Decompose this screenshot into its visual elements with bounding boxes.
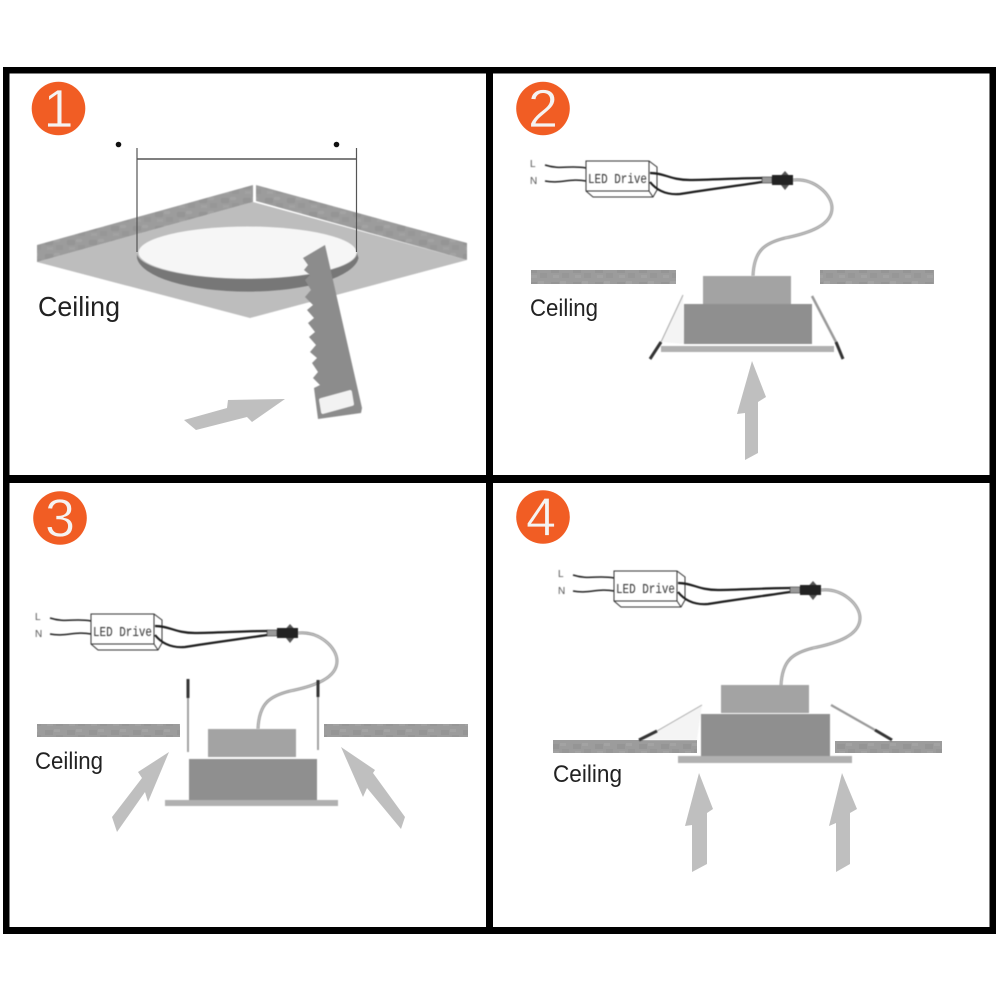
arrow: right up [829, 773, 857, 872]
panel: step 4 lamp seated in ceiling [516, 488, 942, 872]
ceiling section left [37, 724, 180, 737]
arrow: push up [737, 361, 766, 460]
label: Ceiling: Ceiling [553, 761, 622, 788]
downlight with raised springs [165, 679, 338, 806]
ceiling slab with round hole [37, 185, 467, 318]
ceiling section right [820, 270, 934, 284]
badge: number 4: 4 [526, 488, 556, 548]
LED driver with wiring: N [530, 176, 537, 187]
ceiling section right [324, 724, 468, 737]
arrow: left diagonal [112, 752, 169, 832]
LED driver with wiring: LED Drive [588, 173, 647, 188]
arrow: right diagonal [341, 747, 405, 829]
LED driver with wiring: LED Drive [616, 583, 675, 598]
label: Ceiling: Ceiling [35, 748, 103, 775]
LED driver with wiring: L [35, 612, 41, 623]
LED driver with wiring [558, 569, 860, 686]
ceiling section left [531, 270, 676, 284]
panel: step 2 connect driver and insert lamp [516, 79, 934, 460]
downlight with springs [650, 276, 843, 359]
badge: number 1 [32, 79, 85, 139]
panel: step 1 cut the ceiling hole [32, 79, 467, 430]
badge: number 4 [516, 488, 570, 548]
LED driver with wiring: N [558, 586, 565, 597]
badge: number 2 [516, 79, 570, 139]
LED driver with wiring: L [558, 569, 564, 580]
badge: number 3: 3 [45, 488, 75, 548]
badge: number 3 [33, 488, 87, 548]
arrow: toward the saw [184, 399, 285, 430]
badge: number 1: 1 [43, 79, 74, 139]
LED driver with wiring: LED Drive [93, 626, 152, 641]
dimension marker across the hole [116, 142, 356, 252]
LED driver with wiring [35, 612, 337, 729]
panel: step 3 fold springs and insert [33, 488, 468, 832]
LED driver with wiring: L [530, 159, 536, 170]
label: Ceiling: Ceiling [38, 291, 120, 322]
arrow: left up [685, 773, 713, 872]
downlight seated with springs [639, 685, 892, 763]
badge: number 2: 2 [528, 79, 558, 139]
icon: hand saw [303, 245, 362, 419]
LED driver with wiring: N [35, 629, 42, 640]
label: Ceiling: Ceiling [530, 295, 598, 322]
LED driver with wiring [530, 159, 832, 276]
ceiling section left [553, 740, 697, 753]
ceiling section right [835, 741, 942, 753]
